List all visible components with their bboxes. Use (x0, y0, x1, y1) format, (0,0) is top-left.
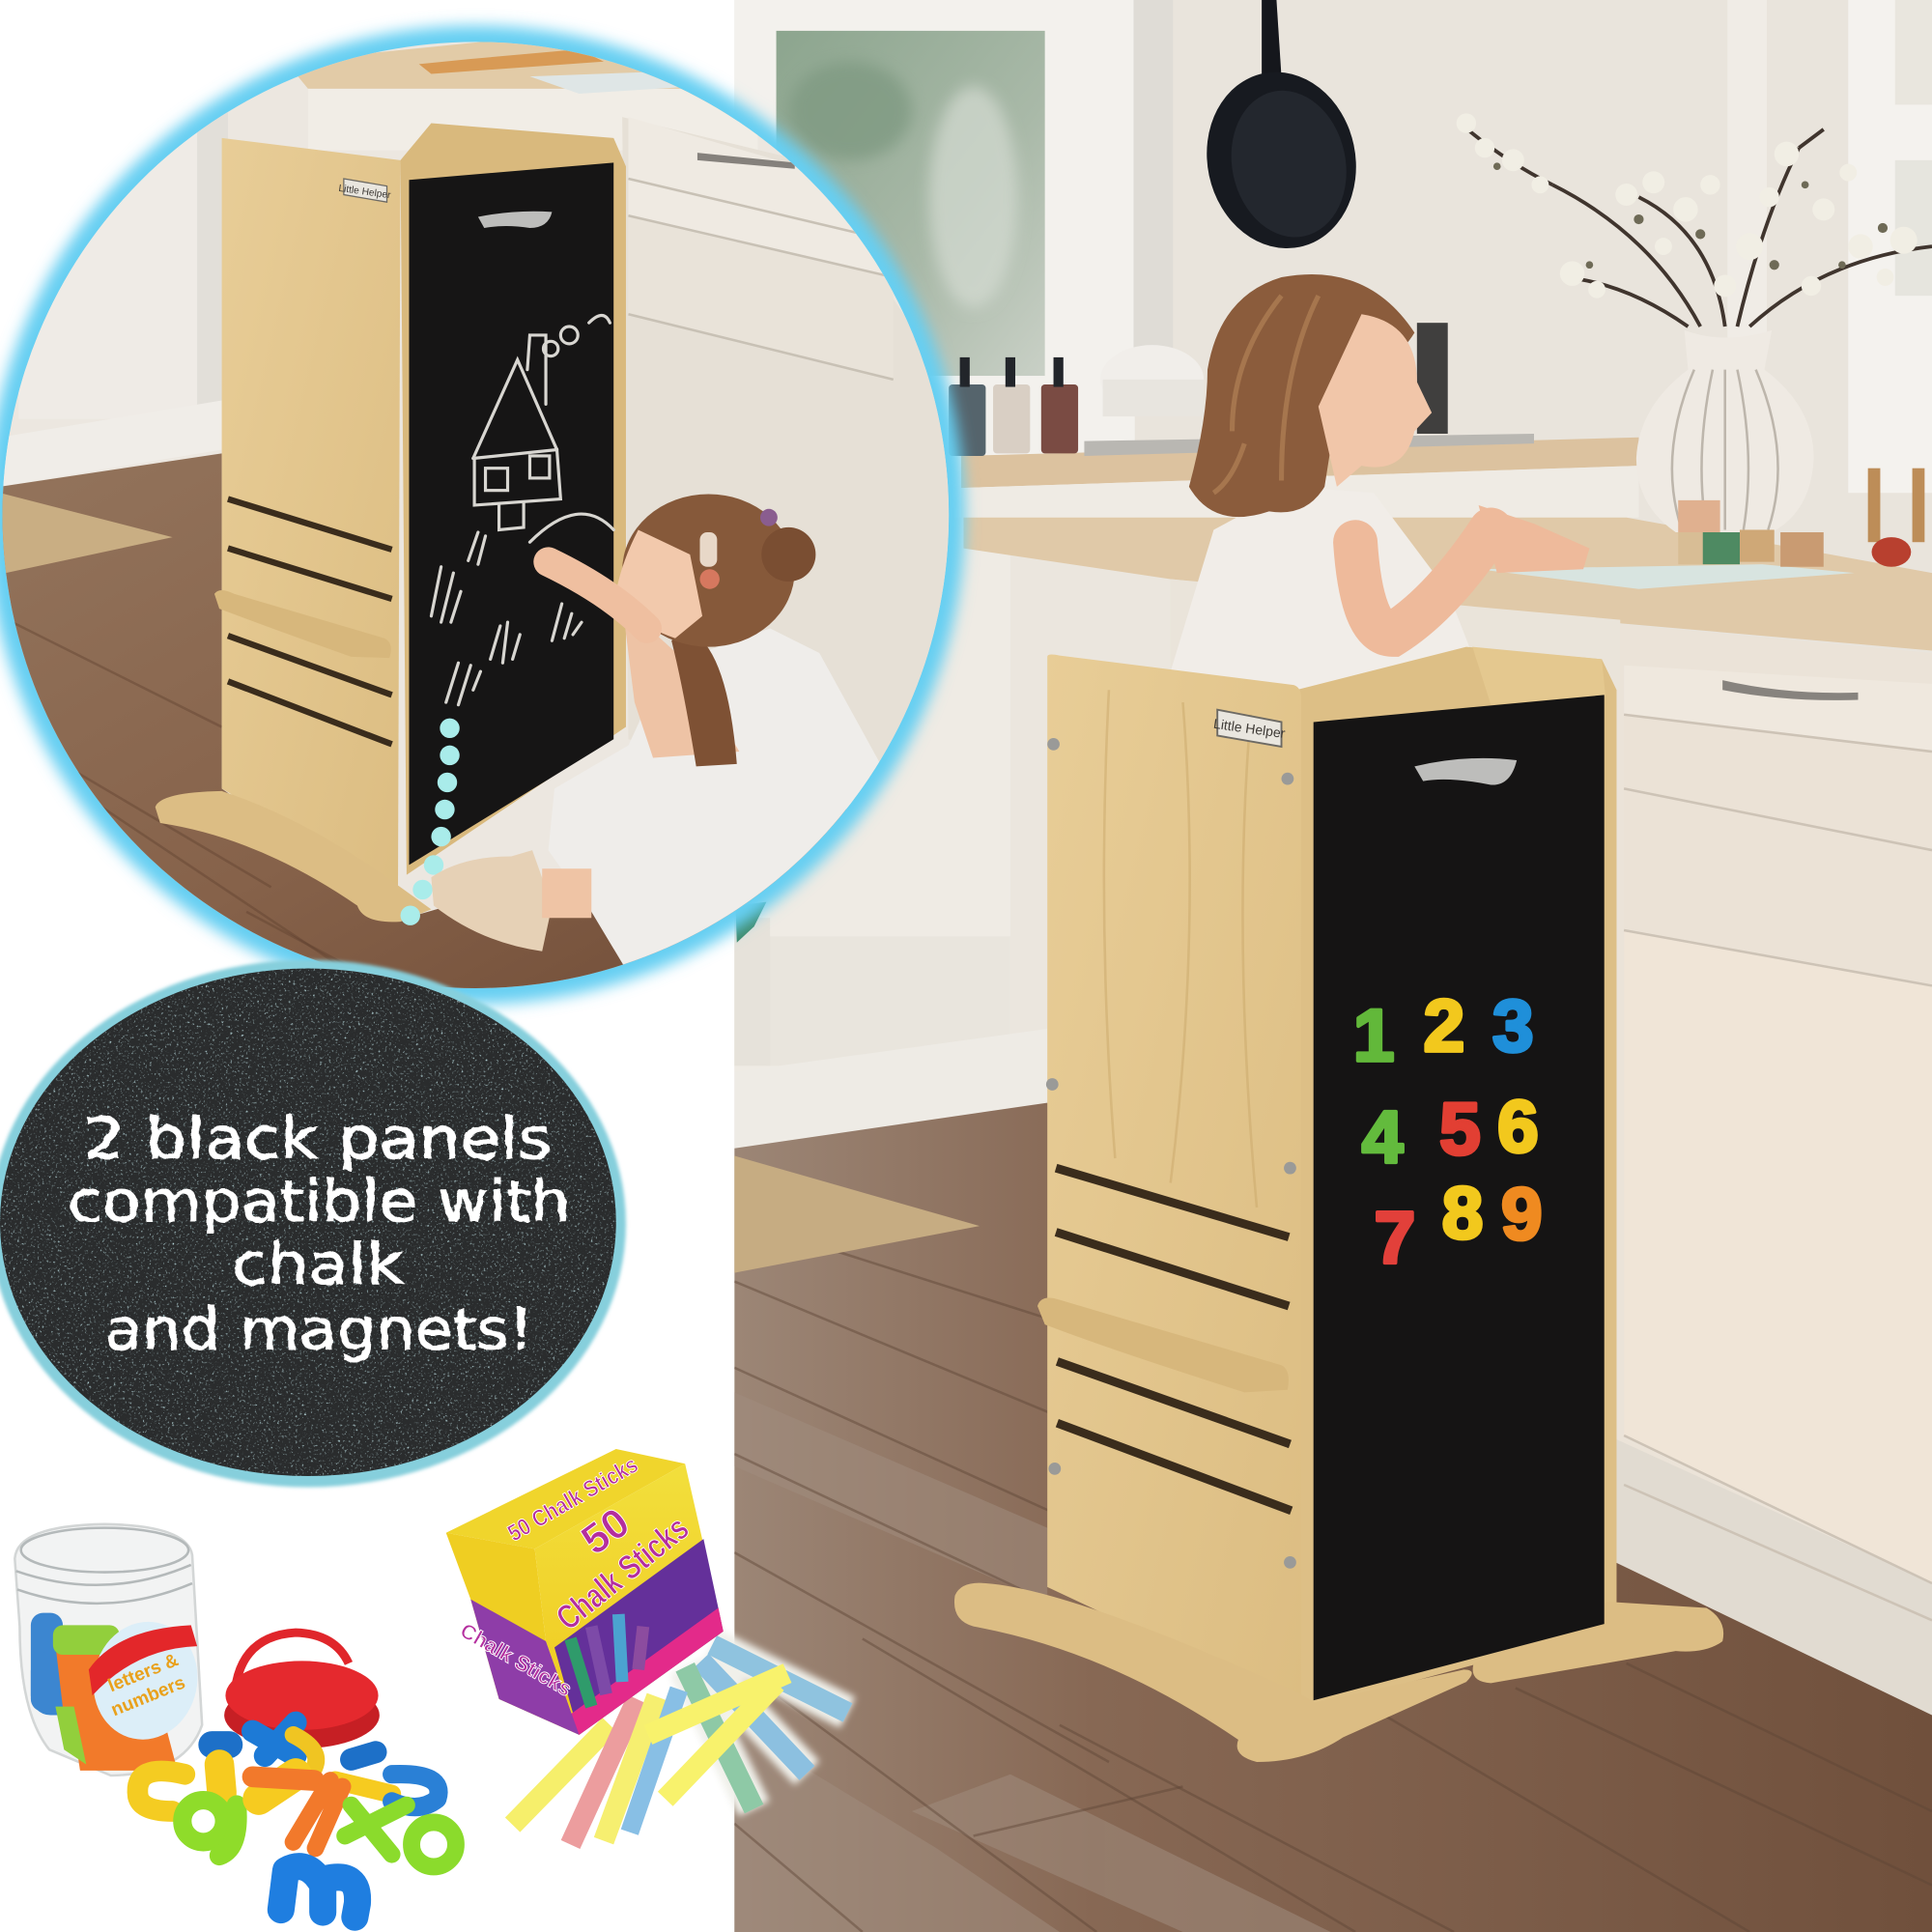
inset brand label: Little Helper (338, 184, 392, 201)
braid (671, 629, 737, 766)
back (622, 604, 739, 757)
callout text: compatible with (68, 1169, 571, 1235)
magnetic numbers: 8 (1442, 1173, 1483, 1255)
chalk yellow centre (604, 1696, 657, 1841)
tower blackboard (1314, 695, 1605, 1700)
inset step (214, 590, 391, 658)
jar label: numbers (108, 1673, 188, 1720)
under counter recess (1172, 580, 1621, 624)
hob and pot (1084, 323, 1534, 456)
circular inset: child drawing on chalkboard (0, 0, 974, 1023)
vase with blossom (1457, 113, 1932, 532)
inset floor (0, 453, 974, 1023)
left cabinets (734, 902, 1047, 1148)
box front face (535, 1463, 724, 1735)
arm (549, 562, 647, 629)
jar lid (224, 1633, 380, 1748)
dress (1171, 518, 1469, 690)
chalk yellow front (666, 1683, 777, 1799)
spice jars (949, 357, 1078, 456)
leg (542, 868, 591, 918)
hand (1479, 505, 1589, 573)
inset base (156, 791, 431, 922)
box front text: 50 Chalk Sticks (503, 1452, 642, 1547)
box magenta strip (569, 1608, 724, 1735)
product: chalk sticks (513, 1645, 848, 1844)
inset left cabinets (0, 111, 228, 487)
box left face (446, 1533, 579, 1735)
front counter (963, 518, 1932, 650)
floor rug (734, 1155, 980, 1273)
tower brand label (1212, 710, 1287, 747)
inset tower side (222, 138, 401, 894)
floor lighter planks (734, 1392, 1331, 1932)
chalk yellow left (513, 1725, 610, 1825)
jar label (82, 1612, 209, 1749)
oval fill (0, 969, 616, 1476)
callout text: chalk (232, 1232, 404, 1297)
inset floor lines (0, 616, 431, 1010)
tower side grain (1104, 690, 1257, 1208)
inset side slots (228, 499, 392, 744)
box front text (456, 1452, 696, 1701)
hair highlights (1213, 296, 1319, 493)
box front text: Chalk Sticks (549, 1509, 696, 1637)
back counter (961, 438, 1638, 518)
callout text: 2 black panels (84, 1106, 552, 1172)
magnetic numbers: 5 (1439, 1089, 1481, 1171)
hair clips (699, 509, 778, 589)
tower base (954, 1583, 1472, 1762)
letter m (281, 1866, 357, 1918)
product: magnetic letters jar (14, 1524, 380, 1776)
right window (1727, 0, 1932, 493)
magnetic numbers: 2 (1424, 985, 1464, 1067)
chalk blue rear (712, 1645, 848, 1713)
tower screws (1046, 738, 1296, 1569)
box top (446, 1449, 685, 1548)
callout text: and magnets! (104, 1297, 533, 1363)
face (1319, 314, 1432, 487)
face (616, 529, 702, 639)
magnetic numbers: 3 (1492, 985, 1534, 1067)
box left purple (470, 1600, 579, 1735)
magnetic numbers: 6 (1497, 1087, 1539, 1169)
box window chalks (571, 1614, 643, 1707)
tower step (1037, 1298, 1289, 1392)
garden window (777, 31, 1045, 376)
oval border (0, 960, 626, 1488)
inset child (431, 494, 887, 974)
tower rear inner wood (1472, 647, 1605, 705)
arm (1355, 529, 1491, 635)
inset rug (0, 493, 173, 574)
wall column (1133, 0, 1173, 357)
chalk pink (571, 1699, 637, 1844)
tower brand label: Little Helper (1212, 716, 1287, 741)
magnetic numbers (1353, 985, 1543, 1279)
callout: chalkboard oval (0, 960, 626, 1488)
window frame (734, 0, 1134, 456)
toy blocks and paper (1479, 469, 1924, 589)
tower side slots (1056, 1168, 1292, 1511)
inset wall (0, 0, 974, 1010)
floor plank lines (734, 1233, 1932, 1932)
tower back edge (1296, 647, 1616, 1713)
jar label: letters & (105, 1650, 182, 1696)
magnetic numbers: 1 (1353, 995, 1394, 1077)
inset right cabinets (622, 117, 974, 838)
hair (622, 494, 795, 647)
skirt (549, 629, 887, 974)
wooden floor (734, 1103, 1932, 1932)
girl on tower (1171, 274, 1589, 721)
chalk drawing: house (431, 316, 613, 705)
box lower purple (554, 1539, 724, 1735)
circular inset glow (0, 26, 965, 1005)
chalk green (685, 1667, 754, 1808)
chalk speckle (0, 961, 622, 1485)
jar letters (31, 1613, 178, 1771)
inset chalkboard (409, 162, 613, 865)
chalk blue mid (701, 1661, 807, 1773)
inset tower back (401, 124, 626, 875)
box front text: 50 (573, 1499, 639, 1564)
hair (1189, 274, 1414, 517)
tower right foot (1473, 1602, 1723, 1683)
callout text (68, 1106, 571, 1363)
chalk yellow cross (648, 1673, 787, 1735)
magnetic numbers: 7 (1375, 1197, 1415, 1279)
product: magnetic letters pile (137, 1722, 456, 1918)
inset handle (478, 212, 552, 228)
magnetic numbers: 4 (1362, 1096, 1404, 1179)
shoe (431, 850, 552, 952)
frying pan (1207, 0, 1356, 248)
magnetic numbers: 9 (1501, 1174, 1543, 1256)
jar (14, 1524, 202, 1776)
jar rim lines (16, 1528, 192, 1604)
tower handle (1414, 758, 1517, 785)
photo: kitchen scene with tower (734, 0, 1932, 1932)
white halo (685, 1645, 848, 1808)
chalk dotted trail (401, 719, 460, 925)
product: chalk box (446, 1449, 724, 1735)
chalk blue front (630, 1690, 679, 1833)
inset counter (286, 31, 757, 151)
box front text: Chalk Sticks (456, 1618, 576, 1701)
tower side panel (1047, 655, 1301, 1707)
kitchen wall (734, 0, 1932, 1158)
right cabinets (1616, 680, 1932, 1716)
